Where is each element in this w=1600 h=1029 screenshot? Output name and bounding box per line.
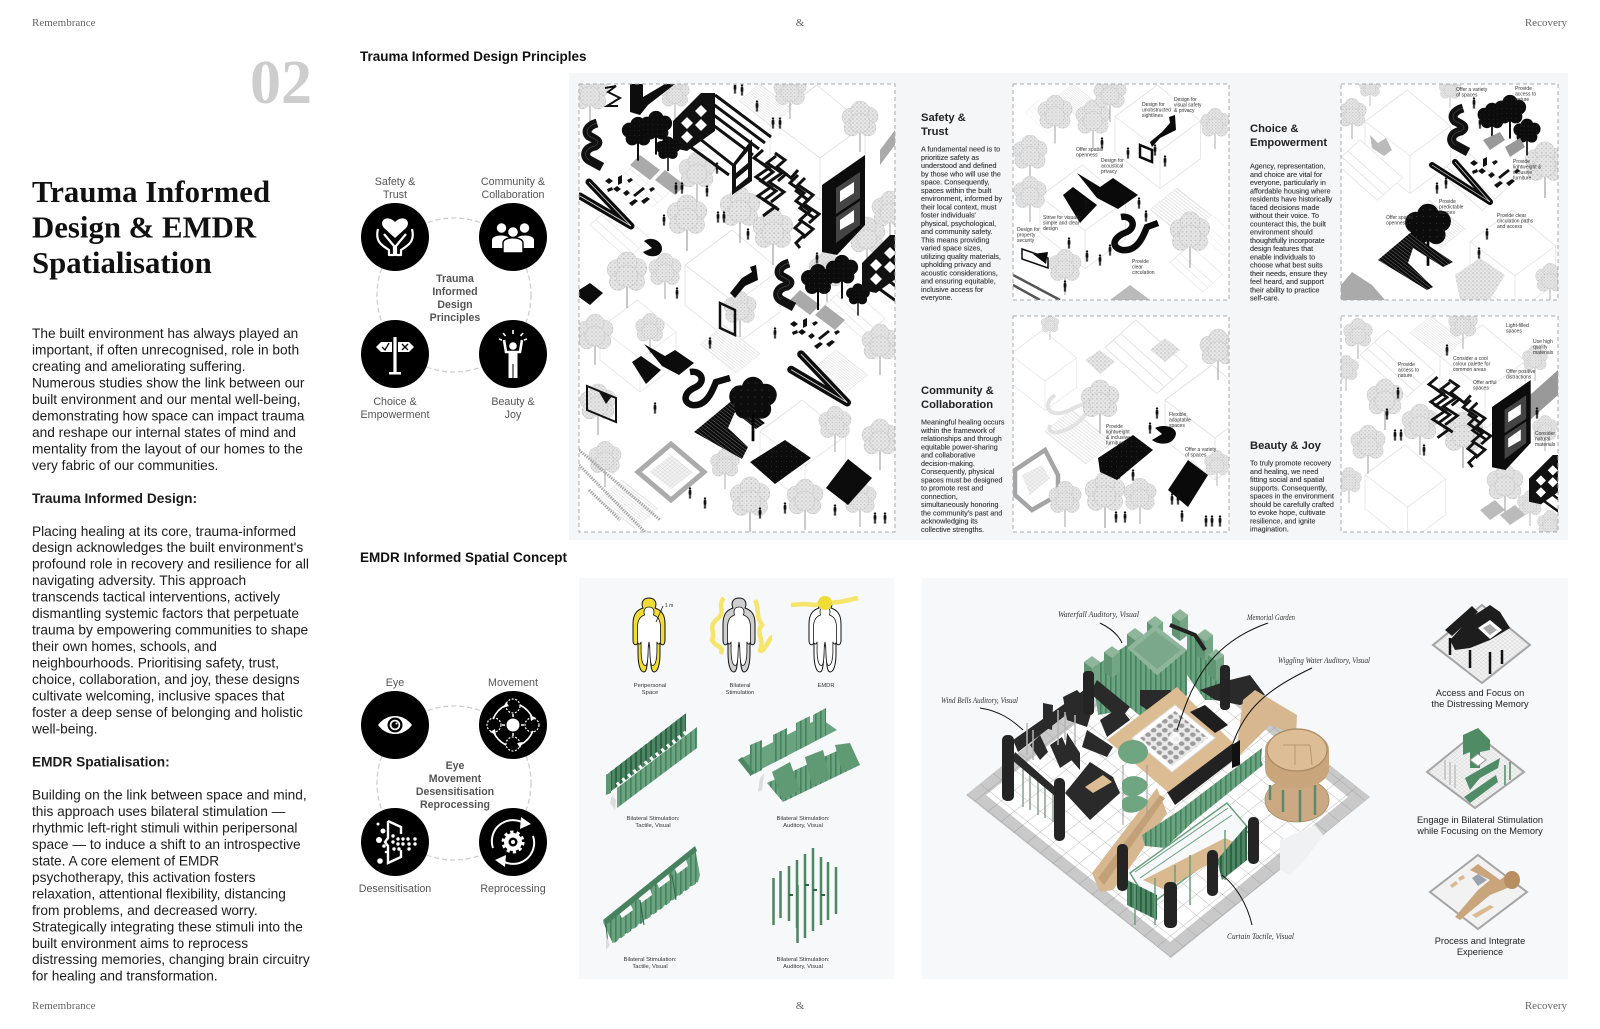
text: community and collaboration: relationships and through — [921, 434, 1002, 443]
figure: peripersonal space: 1 m — [665, 603, 673, 609]
model: poles: Bilateral Stimulation: — [777, 957, 830, 963]
annotations: distractions — [1506, 374, 1532, 380]
diagram: trauma informed design principles — [361, 176, 547, 421]
body text column: for healing and transformation. — [32, 969, 218, 984]
label: centre: Trauma — [436, 273, 474, 285]
panel: trauma informed design principles — [569, 73, 1600, 546]
annotations: unobstructed — [1142, 108, 1171, 114]
icon: desensitisation — [361, 808, 429, 876]
text: community and collaboration: simultaneously honoring — [921, 500, 999, 509]
annotations: and access — [1497, 224, 1523, 230]
annotations: Design for — [1101, 158, 1124, 164]
text: choice and empowerment: Choice & — [1250, 123, 1298, 135]
body text column: EMDR Spatialisation: — [32, 754, 170, 769]
icon: eye — [361, 691, 429, 759]
callout: waterfall — [1058, 609, 1140, 643]
black columns — [1002, 665, 1230, 841]
body text column: neighbourhoods. Prioritising safety, trust, — [32, 656, 279, 671]
text: community and collaboration: within the framework of — [920, 426, 995, 435]
annotations: visual safety — [1174, 102, 1202, 108]
text: beauty and joy: supports. Consequently, — [1250, 483, 1327, 492]
label: eye: Eye — [386, 677, 404, 689]
annotations: Provide clear — [1497, 213, 1527, 219]
text: beauty and joy: fitting social and spatial — [1250, 475, 1325, 484]
text: safety and trust: This means providing — [921, 235, 989, 244]
annotations: & inclusive — [1106, 435, 1130, 441]
figure: emdr: EMDR — [817, 683, 835, 689]
body text column: dismantling systemic factors that perpetuate — [32, 606, 299, 621]
text: community and collaboration: Meaningful healing occurs — [921, 418, 1005, 426]
annotations: of spaces — [1185, 452, 1207, 458]
body text column: built environment and our mental well-being, — [32, 392, 301, 407]
illustration: beauty and joy — [1340, 316, 1558, 532]
diagram: eye movement desensitisation reprocessing — [359, 677, 547, 895]
text: community and collaboration: Community & — [921, 385, 994, 397]
icon: reprocessing — [479, 808, 547, 876]
text: beauty and joy: resilience, and ignite — [1250, 516, 1316, 525]
annotations: circulation paths — [1497, 218, 1534, 224]
text: safety and trust: physical, psychological, — [921, 219, 996, 228]
step: process and integrate — [1430, 855, 1527, 957]
model: auditory wall — [738, 708, 860, 829]
text: choice and empowerment: enable individuals to — [1250, 252, 1315, 261]
text: community and collaboration: Collaboration — [921, 399, 993, 411]
running header: & — [796, 17, 805, 29]
body text column: Building on the link between space and mind, — [32, 787, 307, 802]
step: process and integrate: Experience — [1457, 947, 1503, 957]
text: community and collaboration: and collaborative — [921, 450, 975, 460]
figure: emdr — [791, 596, 858, 689]
model: curtain: Bilateral Stimulation: — [624, 957, 677, 963]
body text column: profound role in recovery and resilience for all — [32, 557, 309, 572]
text: beauty and joy — [1250, 440, 1334, 534]
figure: peripersonal space: Peripersonal — [634, 683, 666, 689]
step: process and integrate: Process and Integrate — [1435, 936, 1525, 946]
text: choice and empowerment: environment should — [1250, 228, 1313, 236]
model: tactile wall: Tactile, Visual — [635, 823, 671, 829]
title: Design & EMDR — [32, 210, 257, 244]
curtain frame and table — [1127, 803, 1250, 925]
label: centre: Informed — [432, 286, 478, 298]
text: choice and empowerment: residents have historically — [1250, 194, 1333, 204]
illustration: safety and trust — [1013, 76, 1240, 300]
running footer — [32, 1000, 1567, 1012]
heading: trauma informed design principles: Trauma Informed Design Principles — [360, 49, 587, 64]
running footer: Recovery — [1525, 1000, 1567, 1012]
text: safety and trust: Trust — [921, 126, 949, 138]
text: safety and trust: and ensuring equitable, — [921, 276, 996, 286]
annotations: Offer artful — [1473, 380, 1497, 386]
body text column: rhythmic left-right stimuli within peripersonal — [32, 820, 297, 835]
annotations — [1398, 323, 1556, 448]
text: choice and empowerment: self-care. — [1250, 294, 1280, 302]
text: choice and empowerment: without their voice. To — [1249, 211, 1319, 220]
icon: joyful figure — [479, 320, 547, 388]
text: safety and trust: utilizing quality materials, — [921, 252, 1001, 261]
body text column: very fabric of our communities. — [32, 458, 218, 473]
figure: bilateral stimulation: Bilateral — [730, 683, 750, 689]
body text column: this approach uses bilateral stimulation — — [32, 804, 286, 819]
title: Trauma Informed — [32, 175, 270, 209]
heading: emdr informed spatial concept: EMDR Informed Spatial Concept — [360, 550, 568, 565]
annotations: Provide — [1439, 199, 1456, 205]
annotations: openness — [1386, 220, 1408, 226]
annotations: Light-filled — [1506, 323, 1529, 329]
text: beauty and joy: should be carefully crafted — [1250, 500, 1334, 509]
callout: wiggling water — [1233, 655, 1371, 743]
body text column: navigating adversity. This approach — [32, 573, 246, 588]
running footer: & — [796, 1000, 805, 1012]
black foreground columns — [1117, 817, 1259, 928]
annotations: adaptable — [1169, 418, 1191, 424]
text: safety and trust: understood and defined — [921, 161, 997, 170]
label: centre: Reprocessing — [420, 799, 490, 811]
callout: wind bells — [941, 695, 1023, 730]
label: desensitisation: Desensitisation — [359, 883, 431, 895]
annotations: acoustical — [1101, 164, 1123, 170]
illustration: choice and empowerment — [1340, 84, 1558, 300]
annotations: materials — [1535, 442, 1556, 448]
text: safety and trust: environment, informed by — [921, 194, 1003, 203]
annotations: Provide — [1106, 424, 1123, 430]
body text column: distressing memories, changing brain circuitry — [32, 952, 310, 967]
text: safety and trust: inclusive access for — [921, 285, 984, 294]
text: safety and trust: space. Consequently, — [921, 178, 990, 186]
body text column: The built environment has always played an — [32, 326, 298, 341]
body text column: creating and ameliorating suffering. — [32, 359, 246, 374]
label: centre: Desensitisation — [416, 786, 494, 798]
text: community and collaboration: decision-making. — [921, 459, 975, 468]
panel: emdr spatial concept model — [922, 578, 1568, 979]
text: safety and trust: spaces within the built — [921, 186, 991, 195]
text: safety and trust: upholding privacy and — [921, 260, 991, 269]
text: safety and trust — [921, 112, 1003, 302]
label: centre: Eye — [446, 760, 465, 772]
label: choice and empowerment: Choice & — [373, 396, 417, 408]
annotations: Offer positive — [1506, 369, 1536, 375]
icon: signpost — [361, 320, 429, 388]
text: beauty and joy: Beauty & Joy — [1250, 440, 1322, 452]
text: safety and trust: Safety & — [921, 112, 966, 124]
text: beauty and joy: to evoke hope, cultivate — [1250, 508, 1326, 517]
annotations: Design for — [1174, 97, 1197, 103]
annotations: colour palette for — [1453, 362, 1491, 368]
annotations: spaces — [1169, 423, 1185, 429]
callout: waterfall: Waterfall Auditory, Visual — [1058, 609, 1140, 619]
annotations: Provide — [1132, 259, 1149, 265]
callout: curtain: Curtain Tactile, Visual — [1227, 931, 1295, 941]
label: beauty and joy: Beauty & — [491, 396, 535, 408]
annotations: Offer spatial — [1076, 147, 1103, 153]
running footer: Remembrance — [32, 1000, 96, 1012]
label: reprocessing: Reprocessing — [480, 883, 546, 895]
model: poles — [774, 848, 836, 970]
annotations: furniture — [1513, 176, 1532, 182]
text: safety and trust: foster individuals' — [921, 210, 977, 220]
label: beauty and joy: Joy — [505, 409, 522, 421]
model: auditory wall: Auditory, Visual — [783, 823, 823, 829]
annotations: & privacy — [1174, 108, 1195, 114]
annotations: access to — [1398, 368, 1419, 374]
text: community and collaboration — [920, 385, 1005, 534]
green wavy wall — [1142, 748, 1263, 848]
annotations: clear — [1132, 264, 1143, 270]
panel: bilateral stimulation studies — [579, 578, 894, 979]
annotations: privacy — [1101, 169, 1117, 175]
body text column: foster a deep sense of belonging and holistic — [32, 705, 303, 720]
label: community and collaboration: Collaboration — [482, 189, 545, 201]
annotations: circulation — [1132, 270, 1155, 276]
text: safety and trust: their local context, must — [921, 202, 997, 211]
text: choice and empowerment: design features that — [1250, 244, 1313, 253]
body text column: transcends tactical interventions, actively — [32, 590, 280, 605]
icon: heart in hands — [361, 203, 429, 271]
green spiral stair — [1118, 740, 1148, 825]
illustration: full isometric neighbourhood — [578, 84, 896, 532]
text: choice and empowerment: Agency, representation, — [1250, 162, 1325, 170]
annotations: Provide — [1515, 86, 1532, 92]
highlighted elements — [1378, 95, 1541, 290]
body text column: their own homes, schools, and — [32, 639, 217, 654]
text: safety and trust: prioritize safety as — [921, 153, 979, 162]
illustration: community and collaboration — [1012, 316, 1230, 532]
icon: community people — [479, 203, 547, 271]
text: choice and empowerment: affordable housing where — [1250, 186, 1331, 195]
callout: memorial garden: Memorial Garden — [1246, 612, 1295, 622]
annotations: nature — [1398, 373, 1412, 379]
step: engage in bilateral stimulation: Engage in Bilateral Stimulation — [1417, 815, 1543, 825]
body text column: relaxation, attentional flexibility, distancing — [32, 886, 286, 901]
annotations: common areas — [1453, 367, 1487, 373]
figure: peripersonal space: Space — [642, 690, 658, 696]
body text column: Trauma Informed Design: — [32, 491, 197, 506]
annotations: access to — [1515, 92, 1536, 98]
annotations: furniture — [1106, 440, 1125, 446]
highlighted elements — [1022, 115, 1176, 268]
text: choice and empowerment: thoughtfully incorporate — [1250, 236, 1325, 245]
body text column: demonstrating how space can impact trauma — [32, 408, 305, 423]
figure: peripersonal space — [633, 598, 673, 696]
annotations: Offer a variety — [1456, 87, 1488, 93]
body text column: and reshape our internal states of mind and — [32, 425, 296, 440]
annotations: Offer a variety — [1185, 447, 1217, 453]
annotations: Flexible, — [1169, 412, 1188, 418]
annotations: lightweight — [1106, 430, 1130, 436]
text: community and collaboration: equitable power-sharing — [921, 442, 998, 451]
label: movement: Movement — [488, 677, 538, 689]
step: engage in bilateral stimulation — [1416, 728, 1543, 836]
body text column: Placing healing at its core, trauma-informed — [32, 524, 296, 539]
ground grid — [966, 634, 1370, 958]
label: centre: Movement — [429, 773, 482, 785]
text: beauty and joy: spaces in the environment — [1250, 492, 1334, 500]
callout: wind bells: Wind Bells Auditory, Visual — [941, 695, 1019, 705]
text: choice and empowerment: counteract this, the built — [1250, 219, 1326, 228]
highlighted elements — [1426, 376, 1558, 512]
body text column: Numerous studies show the link between our — [32, 375, 305, 390]
annotations: Offer spatial — [1386, 215, 1413, 221]
annotations: Use high — [1533, 339, 1553, 345]
running header: Recovery — [1525, 17, 1567, 29]
model: auditory wall: Bilateral Stimulation: — [777, 816, 830, 822]
highlighted elements — [1098, 426, 1208, 507]
annotations: security — [1017, 238, 1035, 244]
text: community and collaboration: collective strengths. — [921, 525, 984, 534]
text: choice and empowerment: Empowerment — [1250, 137, 1327, 149]
text: choice and empowerment: and choice are vital for — [1250, 170, 1323, 179]
body text column: space — to induce a shift to an introspective — [32, 837, 301, 852]
text: community and collaboration: connection, — [921, 492, 958, 501]
black maze structure — [1012, 675, 1265, 822]
section number: 02 — [250, 49, 312, 117]
wooden cylinder — [1265, 729, 1329, 822]
text: safety and trust: everyone. — [921, 293, 953, 302]
white tunnel — [1280, 825, 1323, 875]
annotations: design — [1043, 226, 1058, 232]
text: choice and empowerment: feel heard, and support — [1250, 277, 1324, 286]
annotations: spaces — [1439, 210, 1455, 216]
title: Spatialisation — [32, 246, 212, 280]
body text column: choice, collaboration, and joy, these designs — [32, 672, 300, 687]
body text column: cultivate welcoming, inclusive spaces that — [32, 689, 285, 704]
figure: bilateral stimulation — [712, 598, 772, 696]
text: community and collaboration: to promote rest and — [921, 484, 983, 492]
text: choice and empowerment: choose what best suits — [1250, 260, 1323, 270]
text: beauty and joy: and healing, we need — [1250, 467, 1318, 476]
model: axonometric pavilion — [941, 609, 1371, 958]
annotations: sightlines — [1142, 113, 1163, 119]
body text column: important, if often unrecognised, role in both — [32, 342, 299, 357]
annotations: spaces — [1473, 386, 1489, 392]
label: centre: Principles — [430, 312, 480, 324]
annotations: spaces — [1506, 328, 1522, 334]
annotations: nature — [1515, 97, 1529, 103]
step: access and focus: the Distressing Memory — [1431, 699, 1529, 709]
annotations: simple and clear — [1043, 220, 1080, 226]
label: centre: Design — [437, 299, 473, 311]
model: tactile wall: Bilateral Stimulation: — [627, 816, 680, 822]
body text column: Strategically integrating these stimuli into the — [32, 919, 303, 934]
callout: wiggling water: Wiggling Water Auditory, Visual — [1278, 655, 1371, 665]
label: safety and trust: Safety & — [375, 176, 415, 188]
running header: Remembrance — [32, 17, 96, 29]
model: tactile wall — [606, 710, 697, 829]
annotations: predictable — [1439, 204, 1464, 210]
label: safety and trust: Trust — [383, 189, 407, 201]
body text column: built environment aims to reprocess — [32, 936, 248, 951]
annotations: lightweight & — [1513, 164, 1542, 170]
annotations: Provide — [1398, 362, 1415, 368]
annotations — [1386, 86, 1542, 230]
callout: memorial garden — [1177, 612, 1295, 730]
figure: bilateral stimulation: Stimulation — [726, 690, 754, 696]
body text column: psychotherapy, this activation fosters — [32, 870, 256, 885]
icon: movement — [479, 691, 547, 759]
step: access and focus: Access and Focus on — [1436, 688, 1524, 698]
model: poles: Auditory, Visual — [783, 964, 823, 970]
annotations: Consider — [1535, 431, 1555, 437]
body text column: trauma by empowering communities to shape — [32, 623, 308, 638]
annotations: Consider a cool — [1453, 356, 1488, 362]
text: choice and empowerment — [1249, 123, 1333, 302]
text: beauty and joy: To truly promote recovery — [1250, 458, 1331, 468]
annotations: natural — [1535, 436, 1550, 442]
annotations: Design for — [1017, 227, 1040, 233]
text: choice and empowerment: everyone, particularly in — [1250, 178, 1326, 187]
model: curtain — [603, 846, 700, 970]
body text column: well-being. — [31, 722, 97, 737]
annotations: openness — [1076, 152, 1098, 158]
text: safety and trust: and community safety. — [921, 227, 992, 236]
annotations: Design for — [1142, 102, 1165, 108]
text: safety and trust: by those who will use the — [921, 169, 1001, 178]
annotations: quality — [1533, 344, 1548, 350]
body text column: state. A core element of EMDR — [32, 853, 219, 868]
text: community and collaboration: Consequently, physical — [921, 467, 995, 476]
running header — [32, 17, 1567, 29]
green screen wall — [1084, 609, 1224, 730]
step: engage in bilateral stimulation: while Focusing on the Memory — [1416, 826, 1543, 836]
text: safety and trust: varied space sizes, — [921, 244, 982, 252]
body text column: design acknowledges the built environment's — [32, 540, 303, 555]
callout: curtain — [1222, 875, 1295, 941]
annotations: Strive for visually — [1043, 215, 1081, 221]
annotations: inclusive — [1513, 170, 1532, 176]
highlighted elements — [579, 84, 895, 505]
step: access and focus — [1431, 605, 1530, 709]
body text column: mentality from the layout of our homes to the — [32, 441, 303, 456]
text: community and collaboration: the community's past and — [921, 508, 1002, 517]
text: community and collaboration: spaces must be designed — [921, 475, 1003, 484]
wood ramp and platform — [1092, 687, 1297, 892]
body text column: from problems, and decreased worry. — [32, 903, 258, 918]
text: safety and trust: A fundamental need is to — [921, 144, 1000, 154]
annotations: of spaces — [1456, 92, 1478, 98]
text: choice and empowerment: their needs, ensure they — [1250, 269, 1328, 278]
label: community and collaboration: Community & — [481, 176, 545, 188]
text: community and collaboration: acknowledging its — [921, 516, 978, 526]
text: choice and empowerment: faced decisions made — [1250, 203, 1320, 212]
annotations: materials — [1533, 350, 1554, 356]
text: safety and trust: acoustic considerations, — [921, 268, 998, 277]
annotations: property — [1017, 232, 1036, 238]
text: choice and empowerment: their ability to practice — [1250, 285, 1320, 294]
label: choice and empowerment: Empowerment — [361, 409, 429, 421]
text: beauty and joy: imagination. — [1250, 524, 1289, 534]
annotations: Provide — [1513, 159, 1530, 165]
annotations — [1106, 412, 1217, 458]
annotations — [1017, 97, 1202, 276]
model: curtain: Tactile, Visual — [632, 964, 668, 970]
